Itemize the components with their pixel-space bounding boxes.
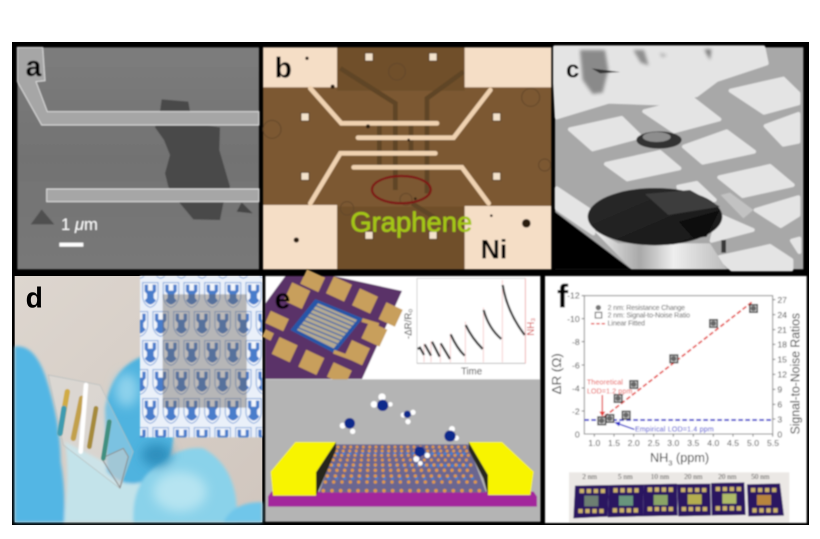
panel c: grayscale SEM [555,47,803,269]
theoretical LOD callout [587,379,633,417]
right gold contact [469,442,534,495]
theoretical LOD callout: Theoretical [587,379,623,386]
left ticks: -6 [572,360,580,370]
fit lines [604,302,752,417]
axis titles: NH [650,451,668,465]
x ticks: 1.5 [608,438,620,448]
sample photo: 2 nm [582,472,597,481]
central lines [340,68,464,227]
left ticks: -12 [567,291,580,301]
alignment marks [301,53,501,239]
legend: 2 nm: Resistance Change [608,305,685,312]
SNR title: Signal-to-Noise Ratios [789,313,803,434]
panel d: flexible device photo [15,276,262,522]
transparent film [48,375,133,488]
label b: b [275,52,292,84]
label d: d [26,283,43,315]
y label: -ΔR/R₀ [403,309,414,339]
right ticks: 21 [777,325,787,335]
via dots [721,193,753,218]
red ellipse [372,176,431,203]
top debris [580,49,711,94]
chip photo [262,269,403,385]
label a: a [26,51,42,83]
label f: f [557,279,569,316]
x ticks: 4.0 [707,438,720,448]
right ticks: 12 [777,370,787,380]
panel e: chip, response chart and sensor model [262,269,540,522]
delta R title: ΔR (Ω) [549,353,564,394]
logo pattern inset [140,276,262,437]
data points [598,305,757,425]
speckles and bubbles [263,63,551,215]
right ticks: 3 [777,414,782,424]
right ticks: 27 [777,295,787,305]
glove highlights [115,373,207,512]
scale label: 1 μm [61,215,98,234]
chart [549,279,803,467]
top electrode [17,47,259,125]
sample photo [569,472,789,522]
x ticks: 2.5 [648,438,660,448]
legend [591,305,690,328]
tiles [555,47,799,269]
axis titles: (ppm) [673,451,709,465]
right ticks: 24 [777,310,787,320]
black corner [555,212,632,269]
glove fingers [15,346,262,522]
label c: c [566,57,579,84]
empirical LOD callout [614,422,714,434]
nickel label: Ni [481,234,507,264]
right ticks: 15 [777,355,787,365]
electrodes [310,88,490,203]
substrate [268,492,537,507]
sample photo: 5 nm [618,472,633,481]
label e: e [275,283,290,315]
legend: Linear Fitted [608,321,645,328]
sample photo: 50 nm [751,472,770,481]
empirical LOD callout: Empirical LOD=1.4 ppm [635,427,714,434]
legend: 2 nm: Signal-to-Noise Ratio [608,313,690,320]
x ticks: 5.0 [747,438,759,448]
needle base [593,230,727,269]
x label: Time [461,366,482,377]
left ticks [567,291,580,439]
panel b: optical micrograph [263,47,551,269]
right ticks: 9 [777,385,782,395]
ammonia molecules [340,393,459,466]
panel f: LOD chart and sample photo [545,276,807,523]
small lens [636,131,682,149]
graphene flake [155,99,230,220]
left gold contact [271,442,336,496]
x ticks: 4.5 [727,438,739,448]
response chart [403,278,537,377]
right ticks: 0 [777,429,782,439]
panel a: SEM image [17,47,259,269]
dark triangle flake [31,209,54,224]
left ticks: -8 [572,337,580,347]
left ticks: -2 [572,406,580,416]
small flake [237,202,253,213]
right ticks [777,295,787,439]
sample photo: 20 nm [718,472,737,481]
right ticks: 18 [777,340,787,350]
x ticks: 3.5 [687,438,700,448]
scale bar [59,243,83,247]
interdigitated electrode [290,299,363,353]
sample photo: 10 nm [651,472,670,481]
lens highlights [645,190,720,215]
NH3 label: NH₃ [526,318,537,336]
right ticks: 6 [777,400,782,410]
x ticks [588,438,779,448]
graphene label: Graphene [350,206,472,237]
left ticks: 0 [575,429,580,439]
x ticks: 2.0 [628,438,640,448]
theoretical LOD callout: LOD=1.2 ppm [587,388,633,395]
x ticks: 5.5 [767,438,779,448]
lattice [319,444,486,492]
left ticks: -10 [567,314,580,324]
sensor model scene [265,379,540,522]
x ticks: 1.0 [588,438,601,448]
bottom electrode [47,189,259,202]
dark lens [588,188,722,245]
left ticks: -4 [572,383,580,393]
contact pads [263,47,551,269]
x ticks: 3.0 [667,438,680,448]
axis titles: 3 [668,458,673,467]
sample photo: 20 nm [684,472,703,481]
